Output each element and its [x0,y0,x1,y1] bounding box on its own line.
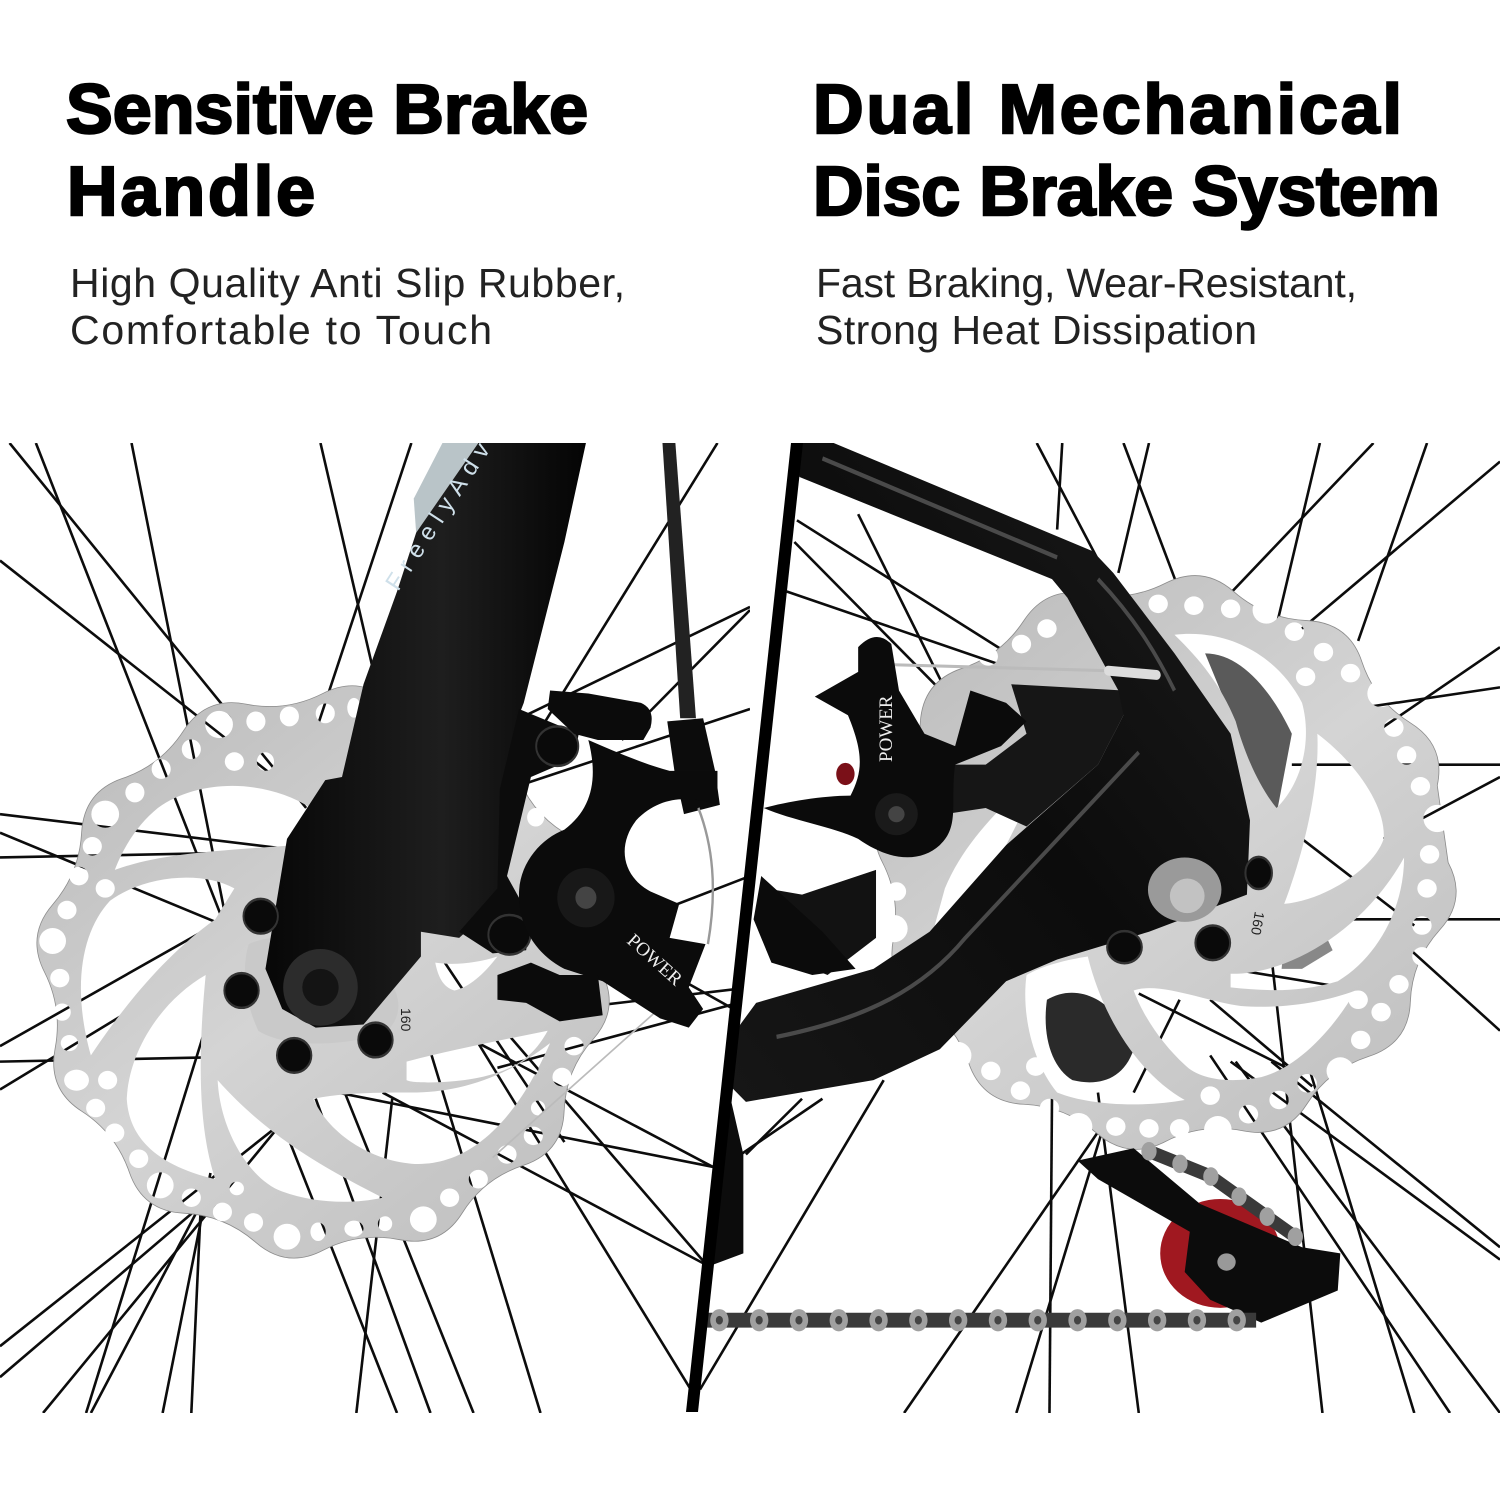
front wheel spokes [0,443,750,1413]
fork lettering: FreelyAdv [380,438,496,595]
chain lower run [700,1308,1256,1332]
axle nut [1148,857,1221,922]
panel: front wheel photo illustration [0,443,750,1413]
rear hub and cassette behind rotor [1046,653,1333,1082]
caliper brand label front: POWER [623,930,686,990]
brake rotor: front [36,685,610,1258]
rear frame tube [731,443,1250,1102]
brake cable and ferrule [884,664,1157,675]
brake rotor: rear [876,575,1457,1150]
heading: sensitive brake handle: Handle [67,152,315,230]
axle bolt [283,949,358,1026]
text block: brake handle description [70,260,625,353]
frame highlights [777,458,1174,1037]
heading: dual mechanical disc brake system: Dual Mechanical [813,70,1402,148]
heading: dual mechanical disc brake system: Disc Brake System [813,152,1440,230]
rotor and mount bolts [224,726,578,1073]
brake caliper [497,690,717,1028]
front fork [265,443,586,1028]
brake cable housing [493,443,720,1158]
heading: sensitive brake handle [66,70,588,230]
rotor hub centre [250,963,332,1042]
front fork sticker [414,443,478,533]
kickstand [714,1102,744,1264]
rear brake caliper [754,637,1027,975]
panel: rear wheel photo illustration [700,443,1500,1413]
interior of frame triangle: hub shadow [940,684,1123,827]
text block: brake handle description: High Quality Anti Slip Rubber, [70,260,625,306]
caliper pivot rear [836,763,918,835]
rotor size label rear: 160 [1248,910,1268,936]
text block: brake handle description: Comfortable to Touch [70,307,492,353]
rotor size label front: 160 [398,1008,414,1032]
text block: disc brake description: Strong Heat Dissipation [816,307,1257,353]
rotor bolts [1107,857,1272,963]
rear wheel spokes [700,443,1500,1413]
interior lower dark block [766,870,876,975]
fork dropout arm [459,709,579,953]
heading: sensitive brake handle: Sensitive Brake [66,70,588,148]
rear derailleur [1078,1148,1340,1323]
diagonal divider [686,443,803,1412]
text block: disc brake description [816,260,1357,353]
heading: dual mechanical disc brake system [813,70,1440,230]
chain upper run [1149,1151,1297,1238]
text block: disc brake description: Fast Braking, Wear-Resistant, [816,260,1357,306]
caliper brand label rear: POWER [876,695,897,762]
caliper pivot [557,868,615,927]
